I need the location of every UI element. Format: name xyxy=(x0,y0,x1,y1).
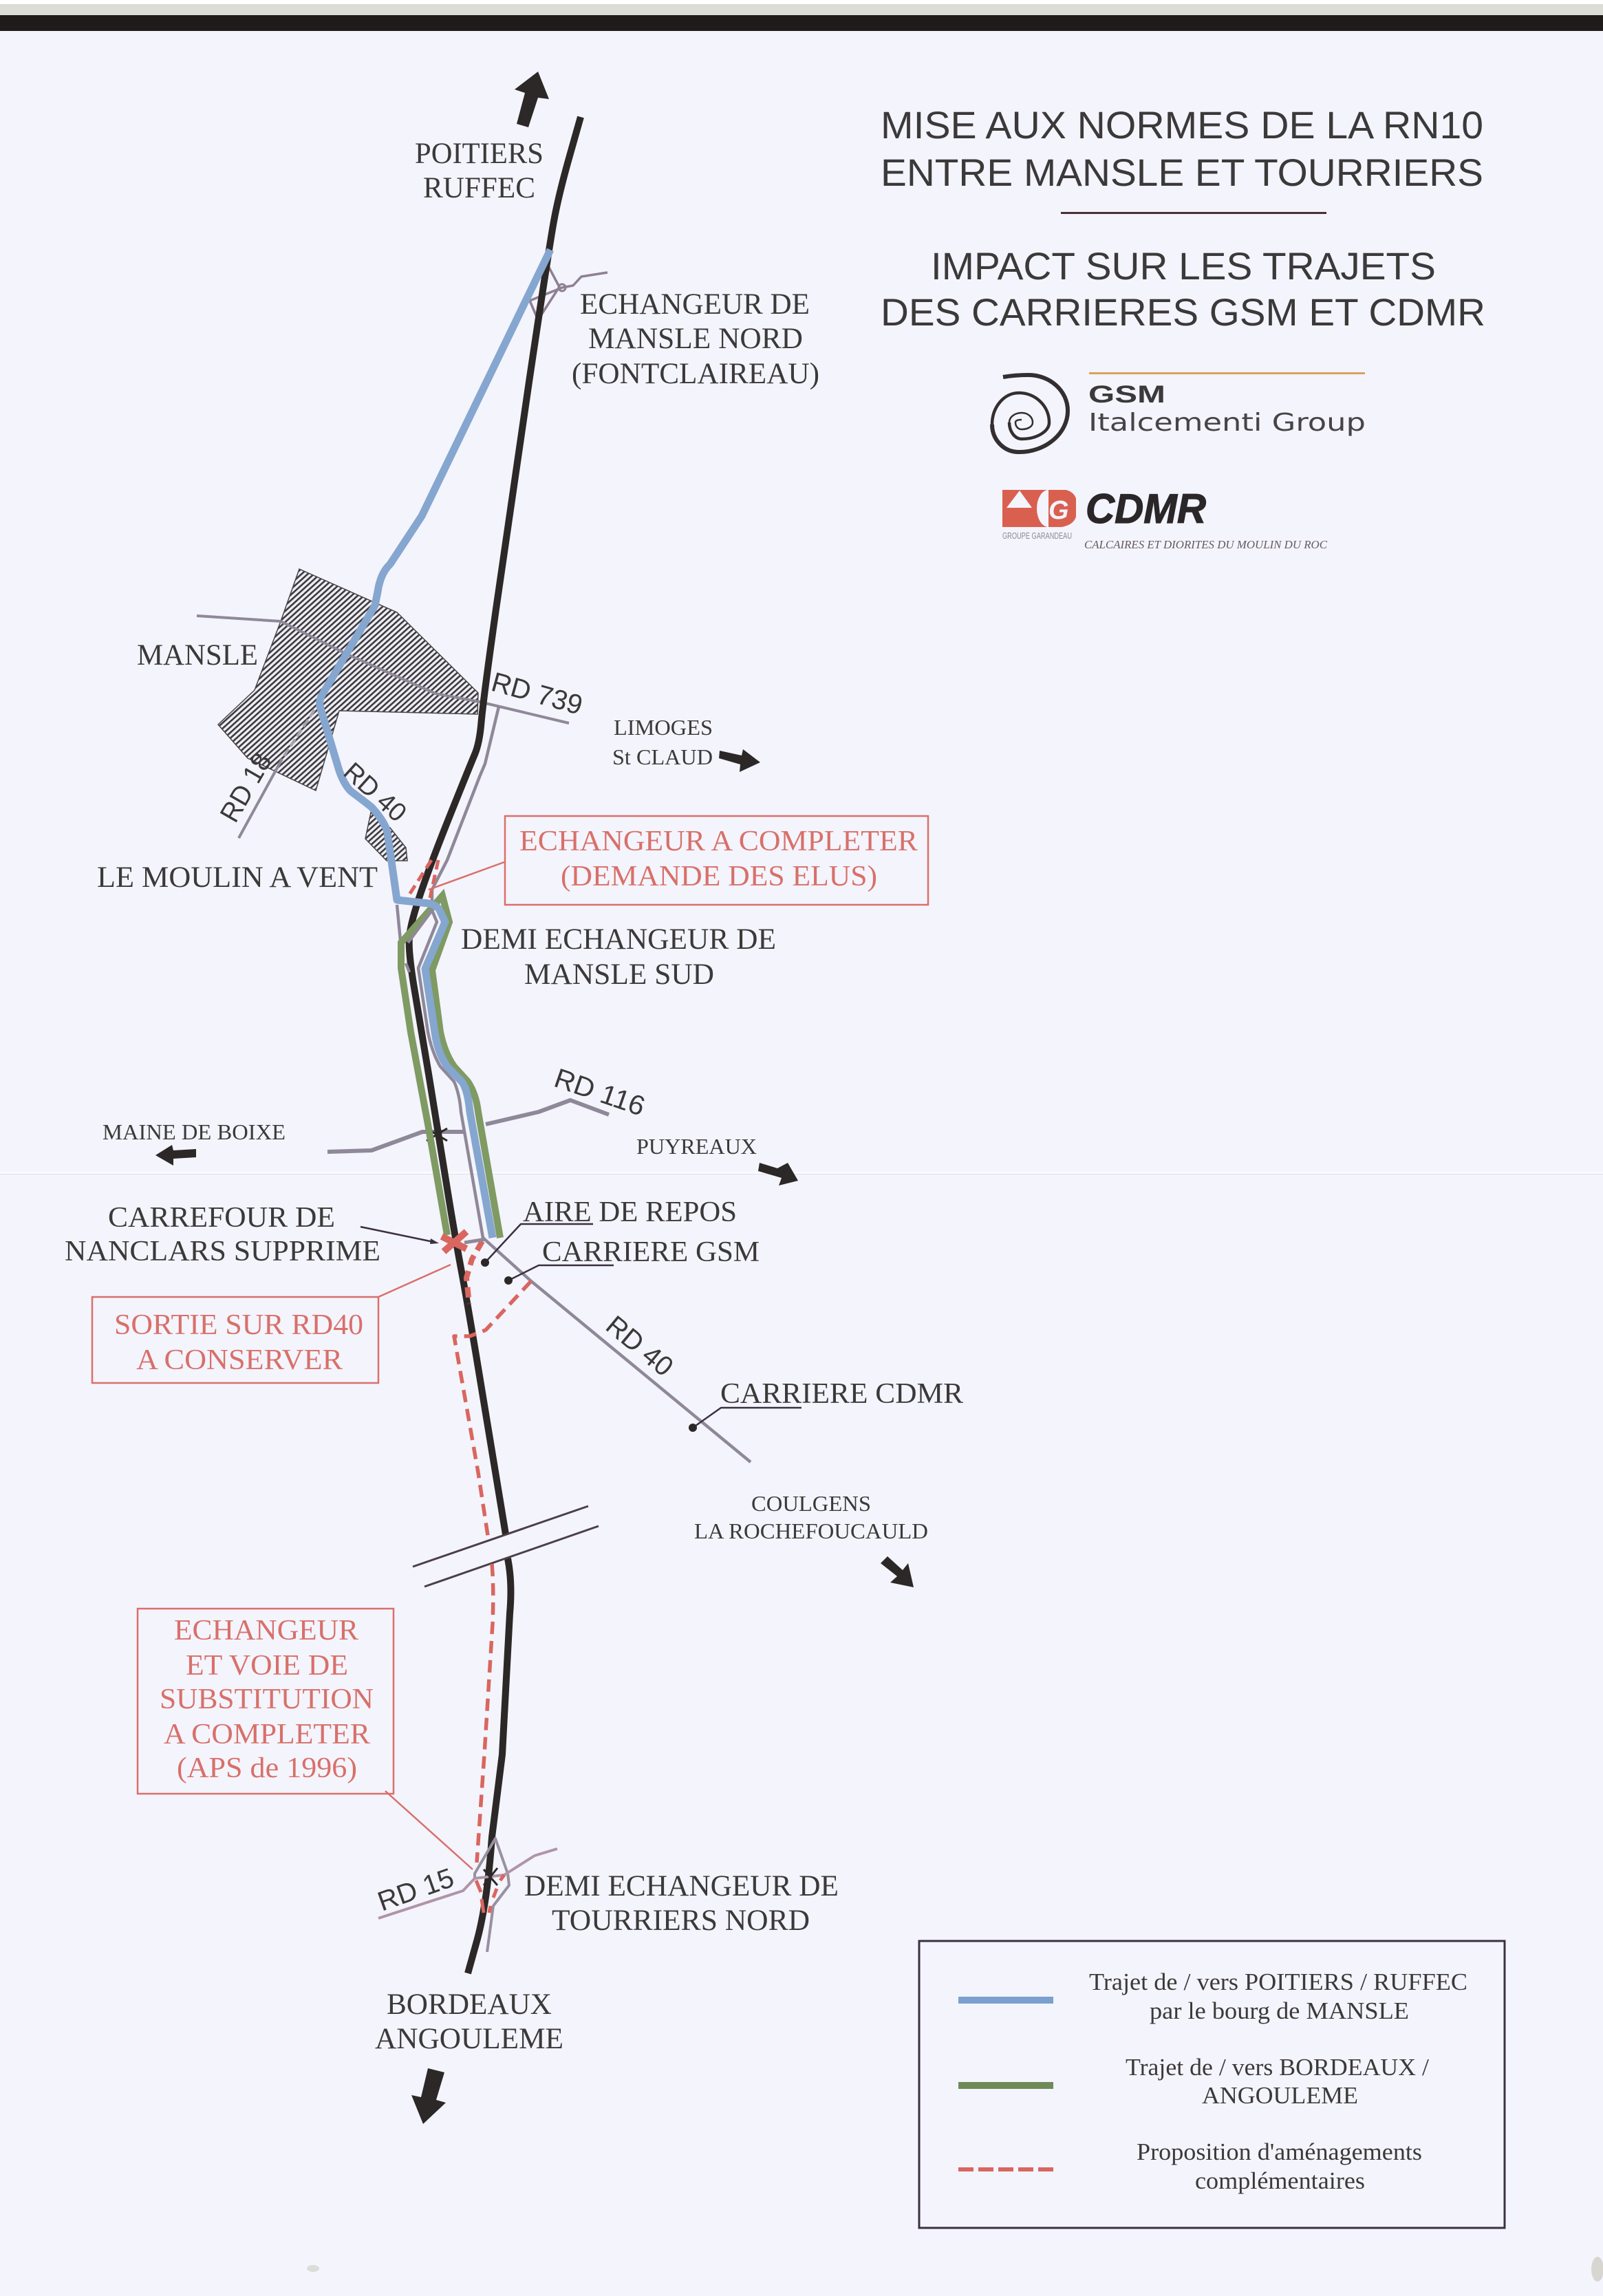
connector to closed junction xyxy=(464,1239,486,1243)
route: blue, to and from Poitiers xyxy=(320,250,550,1238)
callout: sortie sur RD40: SORTIE SUR RD40 xyxy=(114,1309,363,1341)
label: Carriere CDMR xyxy=(689,1378,963,1432)
arrow: to Maine de Boixe xyxy=(155,1145,196,1166)
arrow: to Limoges xyxy=(719,749,760,772)
label: Limoges St Claud: St CLAUD xyxy=(612,744,713,769)
label: Carriere GSM: CARRIERE GSM xyxy=(542,1236,760,1268)
label: Demi echangeur de Mansle Sud: DEMI ECHANGEUR DE xyxy=(461,923,776,956)
subtitle: des carrieres: DES CARRIERES GSM ET CDMR xyxy=(881,290,1485,334)
road label: RD 116: RD 116 xyxy=(550,1063,649,1122)
label: Limoges St Claud xyxy=(612,715,713,769)
logo text: calcaires et diorites: CALCAIRES ET DIORITES DU MOULIN DU ROC xyxy=(1084,538,1328,551)
logo text: groupe garandeau: GROUPE GARANDEAU xyxy=(1002,530,1072,541)
callout: sortie sur RD40 xyxy=(92,1265,451,1383)
legend text: green route: ANGOULEME xyxy=(1202,2082,1358,2109)
logo: GSM Italcementi Group xyxy=(992,372,1366,452)
label: Echangeur de Mansle Nord: ECHANGEUR DE xyxy=(580,288,810,321)
arrow: to Puyreaux xyxy=(758,1163,798,1185)
short link roads at Mansle Sud xyxy=(397,905,409,972)
legend text: blue route: par le bourg de MANSLE xyxy=(1150,1997,1409,2024)
secondary road: RD 739 xyxy=(197,616,569,723)
legend text: proposed works: Proposition d'aménagements xyxy=(1137,2138,1422,2165)
label: Aire de repos: AIRE DE REPOS xyxy=(523,1197,737,1228)
icon: GSM spiral xyxy=(992,375,1068,452)
callout: echangeur et voie de substitution: (APS de 1996) xyxy=(177,1752,357,1784)
logo text: Italcementi Group: Italcementi Group xyxy=(1088,409,1366,437)
label: Carriere CDMR: CARRIERE CDMR xyxy=(720,1378,963,1410)
logo: CDMR xyxy=(1002,486,1328,551)
road label: RD 739: RD 739 xyxy=(488,667,585,721)
title divider xyxy=(1061,212,1326,214)
label: Mansle: MANSLE xyxy=(137,639,258,672)
label: Poitiers Ruffec: RUFFEC xyxy=(423,172,535,204)
proposed works: red dashes xyxy=(409,860,531,1863)
label: Demi echangeur de Tourriers Nord: TOURRIERS NORD xyxy=(552,1905,810,1937)
town area: Le Moulin a Vent xyxy=(365,813,407,861)
label: Carriere GSM xyxy=(504,1236,760,1285)
label: Coulgens La Rochefoucauld: LA ROCHEFOUCAULD xyxy=(694,1519,928,1543)
label: Le Moulin a Vent: LE MOULIN A VENT xyxy=(97,861,378,894)
interchange: Mansle Nord xyxy=(530,264,607,320)
main road: RN10 south section xyxy=(468,1558,510,1973)
label: Poitiers Ruffec: POITIERS xyxy=(415,138,544,170)
secondary road: RD 116 xyxy=(327,1100,609,1152)
arrow: to La Rochefoucauld xyxy=(881,1556,914,1587)
arrow: north to Poitiers xyxy=(515,72,549,127)
legend text: green route xyxy=(1126,2054,1429,2109)
label: Bordeaux Angouleme xyxy=(375,1988,563,2055)
road label: RD 18: RD 18 xyxy=(215,748,278,827)
label: Bordeaux Angouleme: BORDEAUX xyxy=(387,1988,552,2021)
legend text: green route: Trajet de / vers BORDEAUX / xyxy=(1126,2054,1429,2081)
label: Limoges St Claud: LIMOGES xyxy=(614,715,713,740)
label: Bordeaux Angouleme: ANGOULEME xyxy=(375,2023,563,2055)
title: mise aux normes: MISE AUX NORMES DE LA RN10 xyxy=(881,103,1483,147)
legend swatch: green route xyxy=(958,2082,1053,2089)
label: Maine de Boixe: MAINE DE BOIXE xyxy=(103,1119,286,1144)
label: Demi echangeur de Tourriers Nord: DEMI ECHANGEUR DE xyxy=(524,1870,839,1902)
icon: red cross, Nanclars junction closed xyxy=(442,1232,466,1252)
label: Poitiers Ruffec xyxy=(415,138,544,204)
road label: RD 15: RD 15 xyxy=(374,1863,458,1917)
legend swatch: blue route xyxy=(958,1997,1053,2004)
label: Carrefour de Nanclars supprime: CARREFOUR DE xyxy=(108,1202,335,1234)
break marks xyxy=(413,1506,599,1587)
arrow: south to Bordeaux xyxy=(411,2068,446,2124)
label: Carrefour de Nanclars supprime xyxy=(65,1202,439,1267)
interchange: Tourriers Nord xyxy=(378,1838,557,1952)
label: Echangeur de Mansle Nord xyxy=(572,288,819,390)
icon: Garandeau square mark xyxy=(1002,489,1077,528)
logo text: CDMR: CDMR xyxy=(1086,486,1206,532)
label: Echangeur de Mansle Nord: MANSLE NORD xyxy=(588,323,803,355)
title: entre mansle et tourriers: ENTRE MANSLE ET TOURRIERS xyxy=(881,151,1483,194)
legend text: blue route: Trajet de / vers POITIERS / RUFFEC xyxy=(1089,1968,1467,1995)
town area: Mansle xyxy=(218,569,478,791)
label: Coulgens La Rochefoucauld xyxy=(694,1491,928,1543)
title block xyxy=(881,103,1485,334)
route: green, to and from Bordeaux xyxy=(401,896,500,1238)
callout: echangeur et voie de substitution: ECHANGEUR xyxy=(174,1615,358,1646)
callout: echangeur et voie de substitution: A COMPLETER xyxy=(164,1719,370,1750)
label: Demi echangeur de Mansle Sud: MANSLE SUD xyxy=(524,958,714,991)
secondary road: parallel road and RD 40 xyxy=(408,707,751,1462)
label: Echangeur de Mansle Nord: (FONTCLAIREAU) xyxy=(572,358,819,390)
legend text: proposed works xyxy=(1137,2138,1422,2194)
main road: RN10 xyxy=(409,117,581,1534)
callout: echangeur et voie de substitution: ET VOIE DE xyxy=(186,1650,348,1682)
callout: echangeur et voie de substitution: SUBSTITUTION xyxy=(160,1684,374,1715)
icon: Garandeau square mark: G xyxy=(1048,496,1069,525)
callout: echangeur a completer: ECHANGEUR A COMPLETER xyxy=(519,826,918,857)
subtitle: impact sur les trajets: IMPACT SUR LES TRAJETS xyxy=(931,244,1436,288)
road label: RD 40 south: RD 40 xyxy=(600,1310,679,1382)
secondary road: RD 18 xyxy=(239,710,314,838)
callout: echangeur a completer xyxy=(429,816,928,905)
legend text: blue route xyxy=(1089,1968,1467,2024)
label: Aire de repos xyxy=(481,1197,737,1267)
label: Coulgens La Rochefoucauld: COULGENS xyxy=(751,1491,871,1516)
legend xyxy=(919,1941,1505,2228)
legend swatch: proposed works xyxy=(958,2167,1053,2171)
label: Demi echangeur de Tourriers Nord xyxy=(524,1870,839,1937)
bridge mark on RD 116 xyxy=(427,1128,447,1141)
callout: echangeur et voie de substitution xyxy=(138,1609,473,1869)
label: Carrefour de Nanclars supprime: NANCLARS SUPPRIME xyxy=(65,1236,380,1267)
logo text: GSM: GSM xyxy=(1088,381,1165,408)
callout: sortie sur RD40: A CONSERVER xyxy=(136,1344,343,1376)
callout: echangeur a completer: (DEMANDE DES ELUS) xyxy=(561,861,877,892)
road label: RD 40 north: RD 40 xyxy=(338,757,412,828)
legend text: proposed works: complémentaires xyxy=(1195,2167,1365,2194)
label: Puyreaux: PUYREAUX xyxy=(636,1134,757,1159)
label: Demi echangeur de Mansle Sud xyxy=(461,923,776,991)
